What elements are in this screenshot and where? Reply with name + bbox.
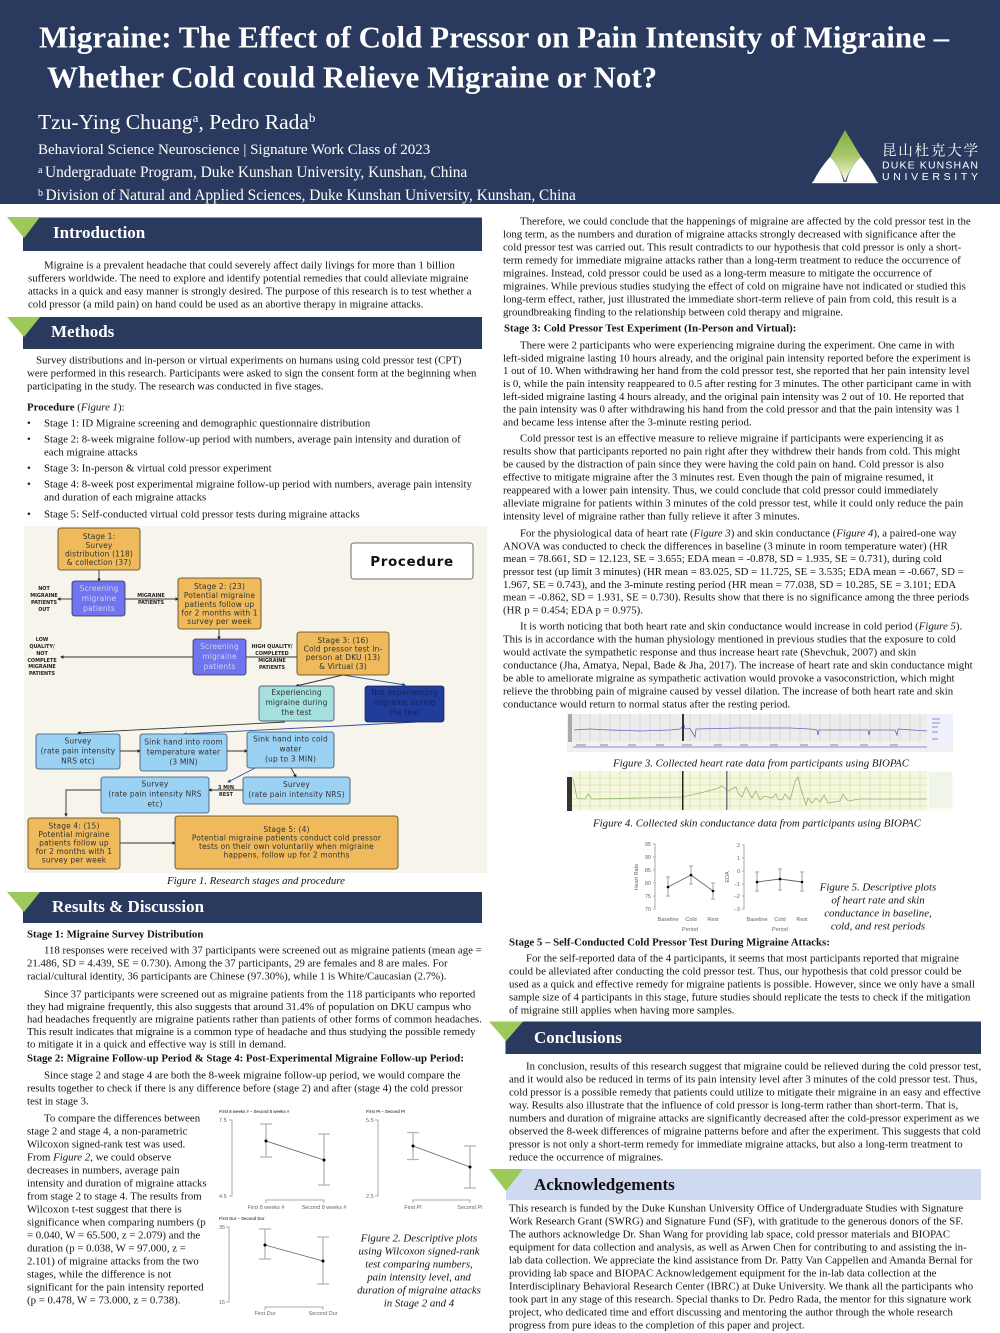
text: stage 3 experiment: Stage 3: Cold Pressor Test Experiment (In-Person and Virtual):	[504, 322, 796, 334]
chart: figure 5 heart rate by period: 85	[645, 868, 651, 874]
text: conclusions paragraph: reduce the occurrence of migraines.	[509, 1152, 663, 1164]
box: sink hand cold water: water	[279, 744, 302, 754]
chart: figure 3 heart rate trace	[567, 714, 953, 752]
chart: first vs second duration: Second Dur	[308, 1311, 338, 1317]
box: stage 2: Stage 2: (23)	[194, 582, 245, 591]
section header: Introduction: Introduction	[53, 223, 146, 242]
box: stage 4: Potential migraine	[38, 830, 110, 839]
chart: figure 5 heart rate by period: 90	[645, 855, 651, 861]
text: stage 3 experiment: be caused by the distraction of pain since they were having the cold pain on hand. Cold pressor is also	[503, 458, 944, 470]
text: physiological data: conductance would return to normal status after the resting period.	[503, 698, 790, 710]
box: sink hand cold water: (up to 3 MIN)	[265, 754, 316, 764]
arrows	[58, 570, 417, 843]
label: migraine patients: PATIENTS	[138, 600, 164, 606]
box: survey 3: Survey	[283, 780, 310, 789]
text: acknowledgements paragraph: The authors acknowledge Dr. Shan Wang for providing lab space, cold pressor materials and BIOPAC	[509, 1228, 950, 1240]
text: stage 5 self-conducted: sample size of 4 participants in this stage, future studies should replicate the tests to check if the mitigation	[509, 992, 971, 1004]
logo: Duke Kunshan University: DUKE KUNSHAN	[882, 160, 978, 172]
text: physiological data: This is in accordance with the human physiology mentioned in previous studies that the exposure to cold	[503, 634, 956, 646]
section header: Conclusions	[489, 1022, 981, 1054]
chart: first vs second 8 weeks number	[219, 1109, 347, 1211]
affiliations: Undergraduate Program, Duke Kunshan University, Kunshan, China	[45, 164, 467, 181]
box: stage 5: Stage 5: (4)	[263, 825, 310, 834]
text: procedure list: each migraine attacks	[44, 446, 138, 458]
chart: figure 5 heart rate by period: Cold	[685, 917, 697, 923]
text: acknowledgements paragraph: equipment for data collection and analysis, as well as Arwen Chen for contributing to and assisting the in-	[509, 1242, 967, 1254]
text: procedure list: •	[27, 478, 31, 490]
box: screening 1: Screening	[80, 584, 118, 593]
box: stage 1: distribution (118)	[65, 550, 133, 558]
chart: figure 5 EDA by period: Rest	[796, 917, 808, 923]
section header: Methods	[7, 317, 482, 349]
text: physiological data	[503, 528, 973, 710]
text: methods paragraph: Survey distributions and in-person or virtual experiments on humans using cold pressor test (CPT)	[36, 354, 462, 366]
authors: , Pedro Rada	[198, 110, 309, 134]
text: procedure list: Stage 3: In-person & virtual cold pressor experiment	[44, 462, 272, 474]
chart: first vs second 8 weeks number: Second 8 weeks #	[302, 1205, 347, 1211]
box: stage 5: happens, follow up for 2 months	[223, 850, 350, 860]
text: stage 1 survey distribution: Stage 1: Migraine Survey Distribution	[27, 928, 203, 940]
text: stage 2 and 4 follow-up: stage 2 and stage 4, a non-parametric	[27, 1126, 188, 1138]
chart: first vs second duration	[219, 1216, 338, 1317]
text: conclusions paragraph: way. Results also illustrate that the influence of cold pressor is long-term rather than short-term. That is,	[509, 1100, 958, 1112]
text: stage 5 self-conducted: For the self-reported data of the 4 participants, it seems that most participants reported that migraine	[526, 952, 959, 964]
box: stage 4	[28, 818, 120, 869]
box: stage 1	[58, 528, 140, 570]
box: survey 2	[101, 777, 209, 813]
text: stage 1 survey distribution: racial/cultural identity, 36 participants are Chinese (97.30%), while 1 is White/Caucasian (2.7%).	[27, 970, 446, 982]
text: procedure list: •	[27, 508, 31, 520]
chart: first vs second pain intensity: 2.5	[366, 1194, 374, 1200]
box: experiencing migraine	[259, 686, 334, 721]
text: conclusions paragraph: observed the 8-week differences of migraine patterns before and after the experiment. This suggests that cold	[509, 1126, 981, 1138]
text: procedure list: and duration of each migraine attacks	[44, 492, 206, 504]
text: conclusions paragraph: pressor is not only a short-term remedy for immediate migraine attacks, but also a long-term treatment to	[509, 1138, 963, 1150]
text: stage 3 experiment: alleviate migraine for patients within 3 minutes of the cold pressor test, while it could only reduce the pain	[503, 498, 964, 510]
box: stage 2: for 2 months with 1	[181, 608, 258, 618]
label: high quality completed	[251, 644, 293, 671]
text: long-term conclusion paragraph: groundbreaking finding to the relationship between cold therapy and migraine.	[503, 306, 843, 318]
caption: figure 5: cold, and rest periods	[831, 920, 925, 932]
box: screening 2: migraine	[202, 652, 237, 661]
text: stage 3 experiment: There were 2 participants who were experiencing migraine during the experiment. One came in with	[520, 340, 955, 352]
box: screening 2: Screening	[200, 642, 239, 651]
caption: figure 2: duration of migraine attacks	[357, 1284, 481, 1296]
text: conclusions paragraph: numbers and duration of migraine attacks are significantly decreased after the cold-pressor experiment as we	[509, 1112, 979, 1124]
chart: figure 4 skin conductance trace	[567, 771, 953, 811]
text: stage 2 and 4 follow-up: significance when comparing numbers (p	[27, 1216, 206, 1228]
text: procedure list	[27, 402, 472, 520]
text: long-term conclusion paragraph: cold pressor test was carried out. This result contradicts to our hypothesis that cold pressor is only a short-	[503, 242, 962, 254]
affiliations: Behavioral Science Neuroscience | Signature Work Class of 2023	[38, 142, 430, 158]
text: long-term conclusion paragraph: migraines. While previous studies studying the effect of cold on migraine have not indicated or studied this	[503, 280, 966, 292]
chart: figure 5 heart rate by period	[634, 842, 719, 933]
text: procedure list: Stage 1: ID Migraine screening and demographic questionnaire distribution	[44, 418, 371, 430]
label: migraine patients	[137, 593, 165, 606]
poster title: Migraine: The Effect of Cold Pressor on Pain Intensity of Migraine –	[39, 20, 950, 54]
section header: Conclusions: Conclusions	[534, 1028, 622, 1047]
affiliations: b	[38, 188, 46, 199]
box: stage 5: tests on their own voluntarily when migraine	[199, 842, 374, 851]
text: introduction paragraph: attacks in a quick and easy manner is strongly desired. The purpose of this research is to test whether a	[28, 286, 472, 298]
text: stage 3 experiment: 1 out of 10. When withdrawing her hand from the cold pressor test, she reported that her pain intensity level	[503, 365, 970, 377]
box: survey 1: (rate pain intensity	[41, 746, 116, 756]
box: stage 3: & Virtual (3)	[319, 662, 367, 671]
box: survey 1: NRS etc)	[61, 756, 95, 766]
text: stage 2 and 4 follow-up: (p = 0.478, W = 73.000, z = 0.738).	[27, 1294, 180, 1306]
text: physiological data: It is worth noticing that both heart rate and skin conductance would increase in cold period (Figure 5).	[520, 620, 962, 632]
box: screening 1	[72, 581, 125, 616]
chart: figure 5 EDA by period: 1	[737, 856, 740, 862]
text: stage 3 experiment: is 0, while the pain intensity reappeared to 0.5 after resting for 3 minutes. The other participant came in with	[503, 378, 972, 390]
box: procedure title	[351, 543, 473, 579]
caption: figure 2: pain intensity level, and	[366, 1272, 471, 1284]
label: high quality completed: PATIENTS	[259, 665, 285, 671]
text: physiological data: mean = -0.862, SD = 1.931, SE = 0.730). Results show that there is no significance among the three periods	[503, 592, 969, 604]
chart: figure 5 EDA by period	[725, 843, 808, 933]
box: sink hand room temperature: (3 MIN)	[169, 758, 198, 766]
text: acknowledgements paragraph: Interdisciplinary Behavioral Research Center (IBRC) at Duke University. We thank all the participants who	[509, 1280, 973, 1292]
box: survey 2: etc)	[147, 800, 163, 808]
text: stage 3 experiment: left-sided migraine lasting 4 hours already, and the original pain intensity was 2 out of 10. He reported that	[503, 391, 964, 403]
text: procedure list: Stage 2: 8-week migraine follow-up period with numbers, average pain intensity and duration of	[44, 434, 461, 446]
label: 3 min rest: REST	[219, 792, 234, 798]
caption: figure 2: Figure 2. Descriptive plots	[360, 1232, 477, 1244]
chart: figure 5 EDA by period: −2	[734, 894, 740, 900]
box: survey 2: (rate pain intensity NRS	[108, 790, 202, 798]
text: stage 2 and 4 follow-up: duration (p = 0.038, W = 97.000, z =	[27, 1242, 186, 1254]
chart: figure 5 heart rate by period: Rest	[707, 917, 719, 923]
text: conclusions paragraph: cold pressor is a possible remedy that patients could utilize to mitigate their migraine in an easy and effective	[509, 1086, 981, 1098]
box: stage 5	[175, 816, 398, 869]
section header: Acknowledgements	[489, 1169, 981, 1200]
chart: first vs second 8 weeks number: 7.5	[219, 1118, 227, 1124]
text: physiological data: be able to ameliorate migraine as sympathetic activation would provoke a vasoconstriction, which might	[503, 672, 955, 684]
label: not migraine patients out	[30, 586, 58, 613]
box: experiencing migraine: Experiencing	[271, 688, 322, 697]
chart: figure 5 heart rate by period: Baseline	[657, 917, 679, 923]
text: stage 5 self-conducted: of migraine still applies when having more samples.	[509, 1004, 734, 1016]
text: physiological data: mean = 78.661, SD = 12.123, SE = 3.655; EDA mean = -0.878, SD = 1.935, SE = 0.731), during cold	[503, 553, 942, 565]
section header: Results & Discussion	[7, 892, 482, 923]
box: not experiencing migraine	[365, 686, 444, 722]
text: acknowledgements paragraph: This research is funded by the Duke Kunshan University Office of Undergraduate Studies with Signature	[509, 1202, 963, 1214]
label: low quality not complete	[27, 637, 57, 677]
text: conclusions paragraph: and it would also be reduced in terms of its pain intensity level after 3 minutes of the cold pressor test. Thus,	[509, 1074, 978, 1086]
box: stage 3: Cold pressor test In-	[304, 644, 383, 654]
text: stage 2 and 4 follow-up: Stage 2: Migraine Follow-up Period & Stage 4: Post-Experimental Migraine Follow-up Period:	[27, 1052, 464, 1064]
poster title	[39, 20, 950, 94]
text: procedure list: Stage 5: Self-conducted virtual cold pressor tests during migraine attacks	[44, 508, 360, 520]
text: methods paragraph: were performed in this research. Participants were asked to sign the consent form at the beginning when	[27, 368, 477, 380]
text: physiological data: pressor test (up limit 3 minutes) (HR mean = 83.025, SD = 11.725, SE = 3.535; EDA mean = -0.667, SD =	[503, 566, 964, 578]
section header: Methods: Methods	[51, 322, 115, 341]
text: stage 3 experiment: effective to mitigate migraine after the 3 minutes rest. Even though the pain of migraine resumed, it	[503, 472, 933, 484]
box: stage 5: Potential migraine patients conduct cold pressor	[192, 834, 382, 842]
text: stage 5 self-conducted: Stage 5 – Self-Conducted Cold Pressor Test During Migraine Attacks:	[509, 936, 830, 948]
box: screening 1: migraine	[82, 594, 116, 603]
text: acknowledgements paragraph	[509, 1202, 973, 1332]
text: stage 1 survey distribution: they had migraine frequently, this also suggests that around 31.4% of population on DKU campus who	[27, 1001, 471, 1013]
box: screening 2	[193, 639, 246, 675]
box: survey 3: (rate pain intensity NRS)	[248, 790, 345, 799]
label: low quality not complete: NOT	[36, 651, 48, 657]
box: sink hand room temperature	[140, 734, 227, 771]
authors: a	[193, 110, 199, 125]
text: stage 2 and 4 follow-up: decreases in numbers, average pain	[27, 1164, 180, 1176]
text: procedure list: •	[27, 418, 31, 430]
text: stage 2 and 4 follow-up	[27, 1052, 464, 1306]
box: experiencing migraine: the test	[281, 708, 312, 717]
text: long-term conclusion paragraph	[503, 216, 971, 318]
text: stage 3 experiment: and became less intense after the 3-minute resting period.	[503, 416, 752, 428]
text: stage 1 survey distribution	[27, 928, 482, 1050]
section header: Acknowledgements: Acknowledgements	[534, 1175, 675, 1194]
text: procedure list: Procedure (Figure 1):	[27, 402, 125, 414]
affiliations: Division of Natural and Applied Sciences, Duke Kunshan University, Kunshan, China	[46, 187, 576, 204]
label: low quality not complete: LOW	[36, 637, 49, 643]
chart: figure 5 EDA by period: EDA	[725, 871, 731, 883]
text: physiological data: conductance (Jha, Amatya, Nepal, Bade & Jha, 2017). The increase of heart rate and skin conductance might	[503, 660, 973, 672]
text: stage 2 and 4 follow-up: To compare the differences between	[44, 1112, 201, 1124]
text: stage 5 self-conducted: used as a quick and effective remedy for migraine patients is possible. However, since we only have a small	[509, 978, 975, 990]
text: procedure list: •	[27, 434, 31, 446]
box: not experiencing migraine: Not experiencing	[371, 688, 438, 697]
label: not migraine patients out: OUT	[38, 607, 50, 613]
authors: b	[309, 110, 315, 125]
text: stage 2 and 4 follow-up: test in stage 3.	[27, 1096, 89, 1108]
chart: first vs second pain intensity: Second PI	[457, 1205, 483, 1211]
text: methods paragraph: participating in the study. The research was conducted in five stages.	[27, 380, 324, 392]
text: physiological data: 1.967, SE = 0.743), and the 3-minute resting period (HR mean = 77.038, SD = 10.285, SE = 3.101; EDA	[503, 579, 956, 591]
chart: figure 5 EDA by period: −3	[734, 907, 740, 913]
chart: figure 5 heart rate by period: Heart Rate	[634, 864, 640, 890]
caption: figure 1: Figure 1. Research stages and procedure	[166, 875, 345, 887]
box: survey 2: Survey	[142, 780, 169, 788]
chart: first vs second duration: 35	[219, 1225, 225, 1231]
box: stage 1: Survey	[86, 541, 113, 550]
label: not migraine patients out: PATIENTS	[31, 600, 57, 606]
label: migraine patients: MIGRAINE	[137, 593, 165, 599]
chart: figure 5 heart rate by period: 75	[645, 894, 651, 900]
box: sink hand cold water	[247, 732, 334, 768]
text: stage 3 experiment: results show that participants reported no pain right after they withdrew their hands from cold. This might	[503, 446, 960, 458]
text: conclusions paragraph	[509, 1060, 981, 1164]
logo: Duke Kunshan University: 昆山杜克大学	[882, 140, 978, 160]
text: procedure list: Stage 4: 8-week post experimental migraine follow-up period with numbers, average pain intensity	[44, 478, 472, 490]
box: stage 1: & collection (37)	[67, 558, 131, 567]
text: stage 2 and 4 follow-up: results together to check if there is any difference before (stage 2) and after (stage 4) the cold pressor	[27, 1082, 463, 1094]
text: introduction paragraph: Migraine is a prevalent headache that could severely affect daily livings for more than 1 billion	[44, 260, 455, 272]
text: physiological data: For the physiological data of heart rate (Figure 3) and skin conductance (Figure 4), a paired-one way	[520, 528, 957, 540]
chart: figure 5 EDA by period: Period	[772, 927, 788, 933]
authors: Tzu-Ying Chuang	[38, 110, 193, 134]
text: physiological data: would activate the sympathetic response and thus increase heart rate (Shevchuk, 2007) and skin	[503, 646, 917, 658]
text: stage 1 survey distribution: had headaches frequently are migraine patients rather than patients of other forms of common headaches.	[27, 1014, 482, 1026]
caption: figure 5: Figure 5. Descriptive plots	[819, 882, 936, 894]
text: stage 2 and 4 follow-up: intensity and duration of migraine attacks	[27, 1178, 207, 1190]
text: stage 3 experiment: the pain intensity was 0 after withdrawing his hand from the cold pressor and that the pain intensity was 1	[503, 404, 960, 416]
chart: first vs second 8 weeks number: 4.5	[219, 1194, 227, 1200]
box: sink hand room temperature: Sink hand into room	[144, 738, 223, 746]
poster title: Whether Cold could Relieve Migraine or Not?	[47, 60, 657, 94]
label: low quality not complete: MIGRAINE	[28, 664, 56, 670]
text: stage 1 survey distribution: to mitigate it in a quick and effective way is still in demand.	[27, 1038, 286, 1050]
label: high quality completed: COMPLETED	[255, 651, 289, 657]
label: 3 min rest: 3 MIN	[218, 785, 234, 791]
header banner	[0, 0, 1000, 204]
chart: figure 5 EDA by period: −1	[734, 882, 740, 888]
chart: first vs second pain intensity: First PI	[404, 1205, 422, 1211]
text: physiological data: (HR p = 0.454; EDA p = 0.975).	[503, 604, 643, 616]
box: experiencing migraine: migraine during	[265, 698, 328, 707]
label: not migraine patients out: MIGRAINE	[30, 593, 58, 599]
chart: first vs second 8 weeks number: First 8 weeks #	[248, 1205, 285, 1211]
box: stage 3: person at DKU (13)	[306, 653, 380, 662]
box: stage 4: patients follow up	[39, 838, 109, 848]
box: stage 4: Stage 4: (15)	[48, 822, 100, 830]
text: introduction paragraph	[28, 260, 472, 310]
text: stage 3 experiment: left-sided migraine lasting 10 hours already, and the original pain intensity reported before the experiment is	[503, 352, 971, 364]
caption: figure 2: test comparing numbers,	[365, 1258, 473, 1270]
text: stage 1 survey distribution: 21.486, SD = 4.439, SE = 0.730). Among the 37 participants, 29 are females and 8 are males. For	[27, 958, 448, 970]
text: physiological data: ANOVA was conducted to check the differences in baseline (3 minute in room temperature water) (HR	[503, 540, 949, 552]
text: stage 3 experiment	[503, 322, 972, 522]
text: stage 3 experiment: intensity level of migraine rather than fully relieve it after 3 minutes.	[503, 510, 800, 522]
text: acknowledgements paragraph: Work Research Grant (SWRG) and Signature Fund (SF), with gratitude to the generous donors of the SF.	[509, 1216, 963, 1228]
text: stage 2 and 4 follow-up: stages, while the difference is not	[27, 1268, 171, 1280]
text: stage 2 and 4 follow-up: From Figure 2, we could observe	[27, 1152, 171, 1164]
text: physiological data: relieve the throbbing pain of migraine caused by vessel dilation. The increase of both heart rate and skin	[503, 686, 954, 698]
label: not migraine patients out: NOT	[38, 586, 50, 592]
text: acknowledgements paragraph: project, who dedicated time and effort discussing and mentoring the author through the whole research	[509, 1306, 953, 1318]
text: stage 3 experiment: reappeared with a lower pain intensity. Thus, we could conclude that cold pressor could immediately	[503, 484, 939, 496]
caption: figure 5: of heart rate and skin	[831, 894, 925, 906]
chart: figure 5 EDA by period: 2	[737, 843, 740, 849]
chart: figure 5 EDA by period: Baseline	[746, 917, 768, 923]
caption: figure 2	[357, 1232, 481, 1310]
text: long-term conclusion paragraph: migraines. Instead, cold pressor could be used as a long-term measure to mitigate the occurrence of	[503, 268, 932, 280]
text: stage 2 and 4 follow-up: from stage 2 to stage 4. The results from	[27, 1190, 202, 1202]
caption: figure 2: in Stage 2 and 4	[384, 1298, 455, 1310]
text: stage 2 and 4 follow-up: 2.101) of migraine attacks from the two	[27, 1256, 199, 1268]
box: not experiencing migraine: the test	[389, 708, 420, 717]
caption: figure 2: using Wilcoxon signed-rank	[358, 1246, 480, 1258]
box: stage 3	[297, 632, 389, 675]
box: stage 2: patients follow up	[185, 600, 254, 609]
text: stage 5 self-conducted: could be alleviated after conducting the cold pressor test. Thus, our hypothesis that cold pressor could be	[509, 966, 962, 978]
box: sink hand room temperature: temperature water	[147, 748, 221, 756]
flowchart: Figure 1 procedure	[24, 526, 487, 873]
text: stage 2 and 4 follow-up: significant for the pain intensity reported	[27, 1282, 204, 1294]
text: stage 1 survey distribution: Since 37 participants were screened out as migraine patients from the 118 participants who reported	[44, 988, 476, 1000]
label: high quality completed: HIGH QUALITY/	[251, 644, 293, 650]
text: acknowledgements paragraph: providing lab space and BIOPAC Acknowledgement equipment for the in-lab data collection at the	[509, 1268, 937, 1280]
text: introduction paragraph: cold pressor (a mild pain) on hand could be used as an abortive therapy in migraine attacks.	[28, 298, 423, 310]
box: stage 4: survey per week	[42, 856, 107, 864]
box: screening 2: patients	[204, 662, 235, 671]
box: survey 1: Survey	[64, 736, 92, 746]
box: sink hand cold water: Sink hand into cold	[253, 734, 328, 744]
chart: first vs second duration: First Dur – Second Dur	[219, 1216, 265, 1221]
box: stage 2	[178, 578, 261, 629]
text: stage 2 and 4 follow-up: Wilcoxon signed-rank test was used.	[27, 1138, 185, 1150]
caption: figure 4: Figure 4. Collected skin conductance data from participants using BIOPAC	[592, 818, 922, 830]
text: stage 1 survey distribution: This result indicates that migraine is a common type of headache and thus studying the possible remedy	[27, 1026, 476, 1038]
label: low quality not complete: QUALITY/	[29, 644, 55, 650]
chart: figure 5 heart rate by period: 95	[645, 842, 651, 848]
text: acknowledgements paragraph: took part in any stage of this research. Special thanks to Dr. Pedro Rada, the mentor for this signature work	[509, 1294, 972, 1306]
chart: figure 5 heart rate by period: 70	[645, 907, 651, 913]
text: stage 2 and 4 follow-up: = 0.040, W = 65.500, z = 2.079) and the	[27, 1230, 200, 1242]
chart: first vs second pain intensity: 5.5	[366, 1118, 374, 1124]
text: stage 3 experiment: Cold pressor test is an effective measure to relieve migraine if participants were experiencing it as	[520, 432, 943, 444]
text: long-term conclusion paragraph: Therefore, we could conclude that the happenings of migraine are affected by the cold pressor test in the	[520, 216, 971, 228]
box: screening 1: patients	[83, 604, 115, 613]
text: long-term conclusion paragraph: long-term effect, rather, just illustrated the immediate short-term relieve of pain from cold, this result is a	[503, 294, 957, 306]
text: long-term conclusion paragraph: long term, as the numbers and duration of migraine attacks strongly decreased with significance after the	[503, 228, 956, 240]
text: stage 2 and 4 follow-up: Wilcoxon t-test suggest that there is	[27, 1204, 182, 1216]
box: survey 3	[243, 777, 350, 804]
label: high quality completed: MIGRAINE	[258, 658, 286, 664]
box: stage 3: Stage 3: (16)	[317, 636, 369, 645]
box: stage 2: survey per week	[187, 617, 252, 626]
box: procedure title: Procedure	[370, 554, 454, 570]
text: stage 1 survey distribution: 118 responses were received with 37 participants were screened out as migraine patients (mean age =	[44, 944, 482, 956]
text: long-term conclusion paragraph: term remedy for immediate migraine attacks rather than a long-term treatment to reduce the occurrence of	[503, 254, 961, 266]
logo: Duke Kunshan University	[812, 130, 978, 183]
affiliations	[38, 142, 576, 204]
affiliations: a	[38, 165, 45, 176]
text: introduction paragraph: sufferers worldwide. The need to explore and identify potential remedies that could alleviate migraine	[28, 272, 469, 284]
box: stage 2: Potential migraine	[184, 591, 255, 600]
text: acknowledgements paragraph: progress from pure ideas to the completion of this paper and project.	[509, 1320, 805, 1332]
box: stage 1: Stage 1:	[83, 532, 115, 541]
label: 3 min rest	[218, 785, 234, 798]
caption: figure 5: conductance in baseline,	[824, 908, 932, 920]
text: stage 5 self-conducted	[509, 936, 975, 1016]
chart: figure 5 heart rate by period: 80	[645, 881, 651, 887]
section header: Introduction	[7, 217, 482, 251]
logo: Duke Kunshan University: UNIVERSITY	[882, 171, 978, 183]
section header: Results & Discussion: Results & Discussion	[52, 897, 205, 916]
chart: first vs second pain intensity: First PI – Second PI	[366, 1109, 405, 1114]
caption: figure 3: Figure 3. Collected heart rate data from participants using BIOPAC	[612, 758, 910, 770]
chart: first vs second duration: First Dur	[254, 1311, 276, 1317]
chart: figure 5 heart rate by period: Period	[682, 927, 698, 933]
text: acknowledgements paragraph: lab data collection. We appreciate the kind assistance from Dr. Patty Van Cappellen and Amanda Bernal for	[509, 1254, 973, 1266]
chart: figure 5 EDA by period: Cold	[774, 917, 786, 923]
label: low quality not complete: PATIENTS	[29, 671, 55, 677]
chart: first vs second 8 weeks number: First 8 weeks # – Second 8 weeks #	[219, 1109, 290, 1114]
box: stage 4: for 2 months with 1	[36, 847, 112, 856]
label: low quality not complete: COMPLETE	[27, 658, 57, 664]
chart: first vs second duration: 15	[219, 1300, 225, 1306]
caption: figure 5	[819, 882, 936, 932]
box: survey 1	[36, 734, 120, 769]
box: not experiencing migraine: migraine during	[373, 698, 436, 707]
chart: first vs second pain intensity	[366, 1109, 483, 1211]
text: methods paragraph	[27, 354, 477, 392]
chart: figure 5 EDA by period: 0	[737, 869, 740, 875]
text: procedure list: •	[27, 462, 31, 474]
text: stage 2 and 4 follow-up: Since stage 2 and stage 4 are both the 8-week migraine follow-up period, we would compare the	[44, 1070, 461, 1082]
text: conclusions paragraph: In conclusion, results of this research suggest that migraine could be relieved during the cold pressor test,	[526, 1060, 981, 1072]
